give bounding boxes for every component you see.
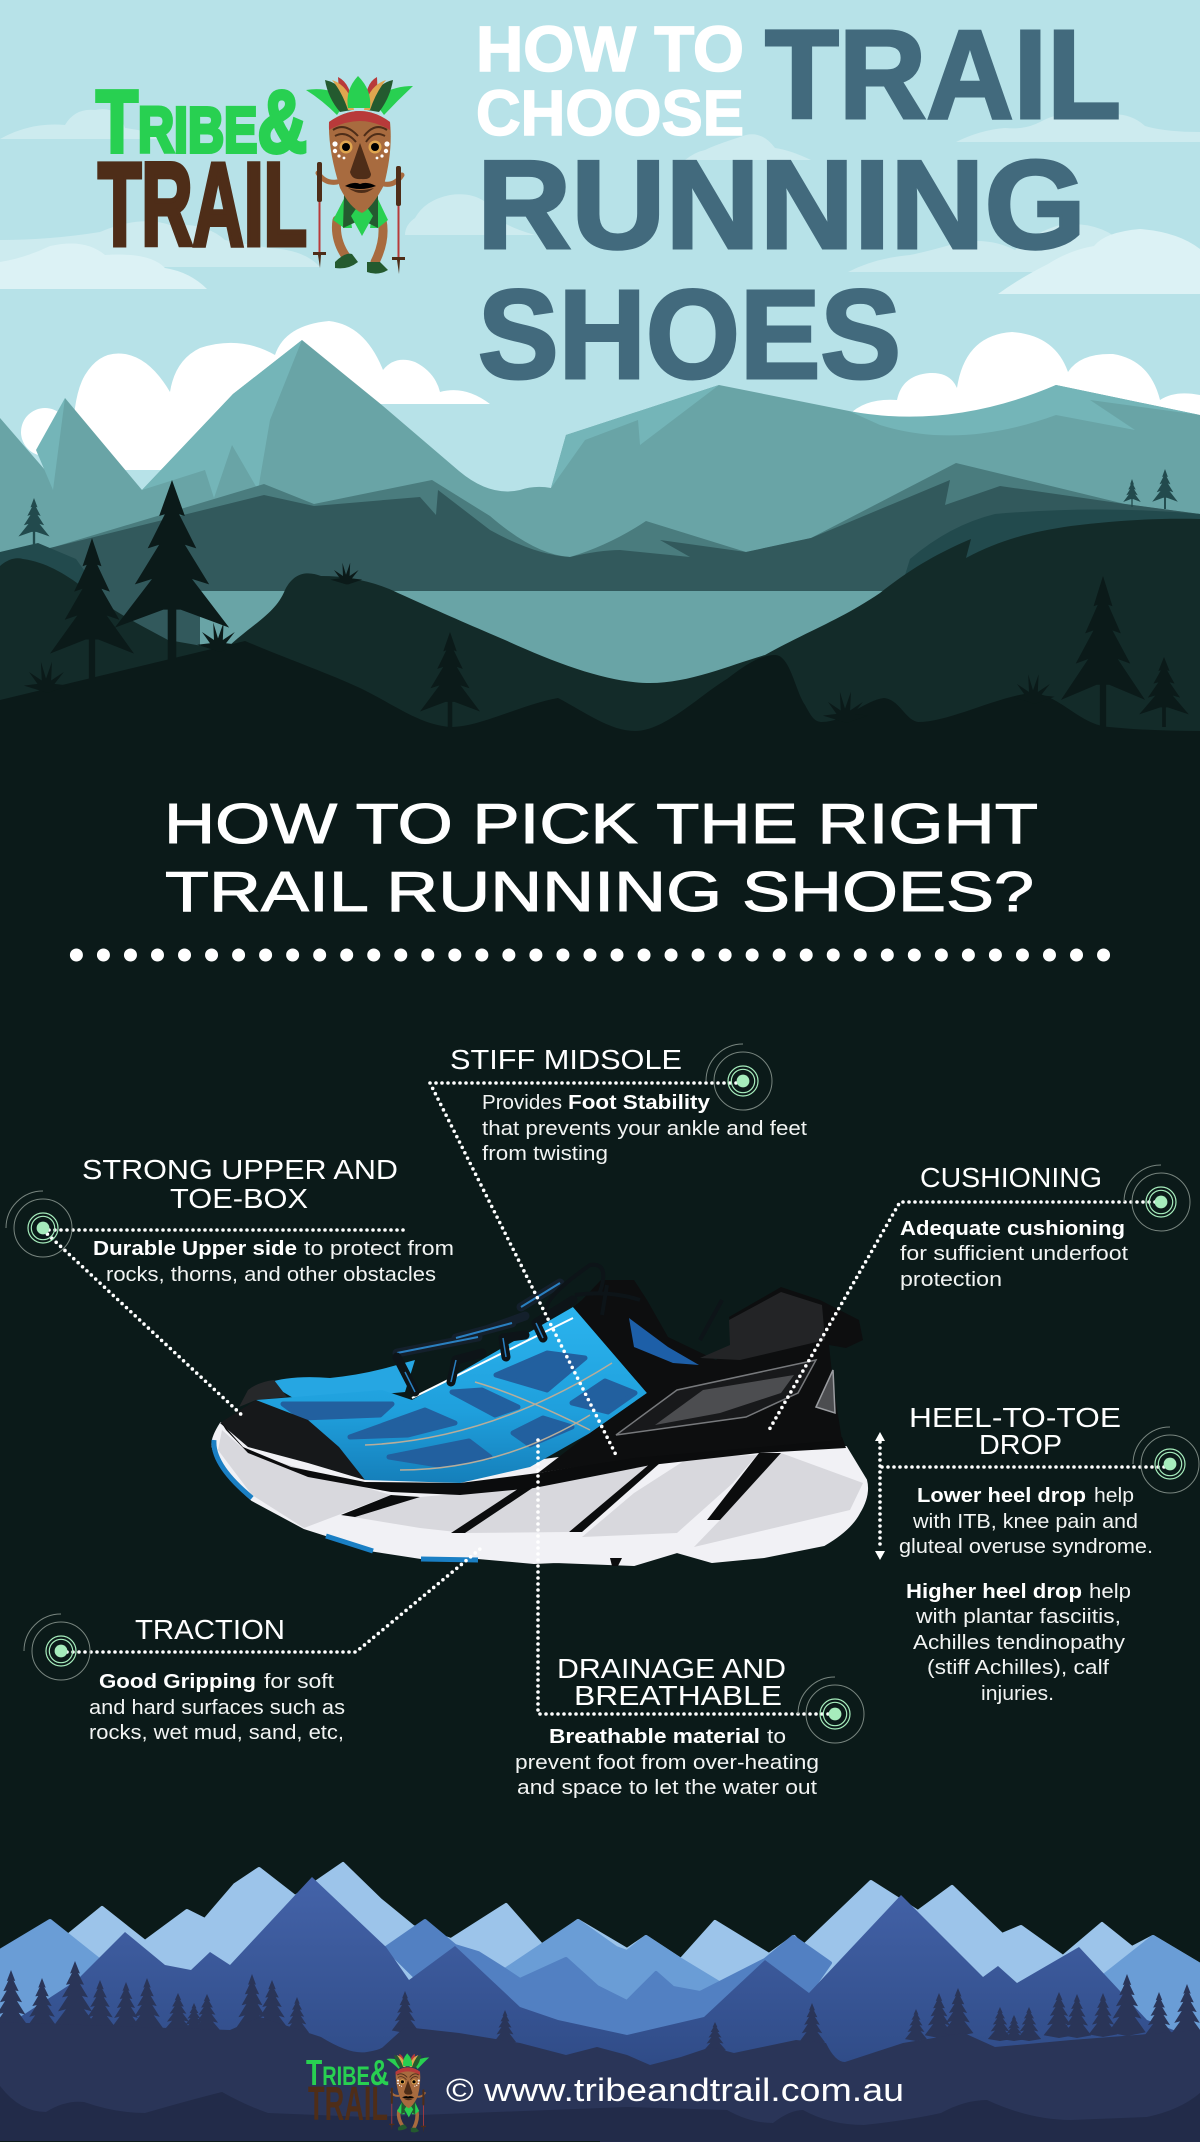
footer logo xyxy=(306,2052,429,2133)
white clouds behind mountains xyxy=(21,321,1200,470)
callout: heel-to-toe drop: injuries. xyxy=(981,1683,1054,1705)
sole stripes xyxy=(341,1453,781,1566)
title: HOW TO xyxy=(476,13,744,85)
darkest foreground ridge xyxy=(0,641,1200,1900)
laces xyxy=(397,1300,573,1392)
teal pine trees xyxy=(18,469,1178,545)
title: CHOOSE xyxy=(476,77,744,149)
title xyxy=(476,4,1121,405)
heel knit collar xyxy=(700,1292,825,1360)
callout: cushioning: CUSHIONING xyxy=(920,1162,1102,1193)
far shoe xyxy=(239,1283,560,1407)
callout: strong upper and toe-box: TOE-BOX xyxy=(170,1183,308,1214)
footer pine trees xyxy=(0,1961,1200,2052)
lake xyxy=(200,591,920,711)
callout: strong upper and toe-box: to protect from xyxy=(304,1238,454,1260)
callout: heel-to-toe drop: gluteal overuse syndrome. xyxy=(899,1536,1153,1558)
callout: strong upper and toe-box: STRONG UPPER AND xyxy=(82,1154,398,1185)
sky background xyxy=(0,0,1200,800)
footer mountains: dark blue range xyxy=(0,1877,1200,2080)
callout: stiff midsole: Provides xyxy=(482,1092,562,1114)
footer mountains: lightest range xyxy=(0,1864,1200,2060)
callout: cushioning: Adequate cushioning xyxy=(900,1218,1125,1240)
black heel upper xyxy=(538,1280,863,1473)
logo: TRAIL xyxy=(98,139,307,271)
blue outsole xyxy=(214,1440,478,1560)
callout: heel-to-toe drop: with ITB, knee pain and xyxy=(912,1511,1138,1533)
vamp xyxy=(256,1307,647,1483)
midsole panels xyxy=(218,1430,863,1547)
middle dark mountain range xyxy=(0,463,1200,720)
footer bottom layer xyxy=(0,2086,1200,2142)
callout: heel-to-toe drop: help xyxy=(1094,1485,1134,1507)
callout: traction: for soft xyxy=(264,1671,334,1693)
callout: strong upper and toe-box xyxy=(82,1154,454,1286)
callout: cushioning xyxy=(900,1162,1129,1291)
callout: stiff midsole: STIFF MIDSOLE xyxy=(450,1044,682,1075)
callout: heel-to-toe drop: help xyxy=(1089,1581,1131,1603)
callout: heel-to-toe drop xyxy=(899,1402,1153,1705)
rim band xyxy=(221,1422,846,1495)
dotted divider xyxy=(76,948,1104,962)
dark foreground hill xyxy=(0,519,1200,800)
callout: drainage and breathable: DRAINAGE AND xyxy=(557,1653,786,1684)
callout: stiff midsole: from twisting xyxy=(482,1143,608,1165)
title: SHOES xyxy=(478,264,901,405)
dark pine trees xyxy=(50,480,1189,729)
footer mountains: mid ranges xyxy=(0,1921,1200,2060)
logo xyxy=(96,72,413,274)
footer logo: TRAIL xyxy=(308,2078,388,2131)
midsole xyxy=(212,1423,867,1565)
heel logo xyxy=(816,1370,835,1413)
callout: drainage and breathable: to xyxy=(767,1726,786,1748)
callout: strong upper and toe-box: rocks, thorns, and other obstacles xyxy=(106,1264,436,1286)
callout: traction xyxy=(89,1614,345,1744)
callout: heel-to-toe drop: (stiff Achilles), calf xyxy=(927,1657,1109,1679)
callout: drainage and breathable: prevent foot from over-heating xyxy=(515,1752,819,1774)
callout: cushioning: for sufficient underfoot xyxy=(900,1243,1129,1265)
callout: cushioning: protection xyxy=(900,1269,1002,1291)
callout: traction: TRACTION xyxy=(135,1614,285,1645)
footer logo: TRIBE& xyxy=(306,2052,389,2093)
callout: heel-to-toe drop: Achilles tendinopathy xyxy=(913,1632,1125,1654)
logo: TRIBE& xyxy=(96,72,307,171)
callout: heel-to-toe drop: HEEL-TO-TOE xyxy=(909,1402,1121,1433)
callout: heel-to-toe drop: Higher heel drop xyxy=(906,1581,1082,1603)
connector lines xyxy=(43,1083,1170,1714)
section heading xyxy=(164,792,1038,924)
shoe photo illustration xyxy=(212,1265,867,1566)
callout: drainage and breathable: BREATHABLE xyxy=(574,1680,782,1711)
heel overlay mesh xyxy=(616,1360,816,1435)
callout: stiff midsole: that prevents your ankle and feet xyxy=(482,1118,807,1140)
callout: drainage and breathable: Breathable material xyxy=(549,1726,760,1748)
title: TRAIL xyxy=(765,4,1121,145)
blue lining xyxy=(629,1318,699,1365)
section heading: HOW TO PICK THE RIGHT xyxy=(164,792,1038,856)
callout: traction: rocks, wet mud, sand, etc, xyxy=(89,1722,344,1744)
ferns xyxy=(24,563,1055,722)
footer foreground band xyxy=(0,2017,1200,2142)
bottom edge line xyxy=(0,2141,600,2142)
heel drop arrow xyxy=(875,1432,885,1560)
toe cap xyxy=(220,1400,365,1480)
vamp trim lines xyxy=(365,1363,612,1470)
callout: traction: Good Gripping xyxy=(99,1671,256,1693)
callout: stiff midsole xyxy=(450,1044,807,1165)
section heading: TRAIL RUNNING SHOES? xyxy=(165,860,1034,924)
pale clouds xyxy=(0,109,1200,294)
title: RUNNING xyxy=(477,134,1086,275)
callout: heel-to-toe drop: Lower heel drop xyxy=(917,1485,1086,1507)
far mountain range xyxy=(0,340,1200,720)
callout: traction: and hard surfaces such as xyxy=(89,1697,345,1719)
callout: strong upper and toe-box: Durable Upper side xyxy=(93,1238,297,1260)
callout: stiff midsole: Foot Stability xyxy=(568,1092,711,1114)
callout: drainage and breathable xyxy=(515,1653,819,1799)
callout: heel-to-toe drop: DROP xyxy=(979,1429,1062,1460)
white lace edge xyxy=(412,1318,573,1398)
footer website: © www.tribeandtrail.com.au xyxy=(446,2072,904,2108)
callout: heel-to-toe drop: with plantar fasciitis, xyxy=(915,1606,1121,1628)
callout: drainage and breathable: and space to let the water out xyxy=(517,1777,817,1799)
teal hills xyxy=(0,510,1200,720)
target markers xyxy=(6,1044,1199,1743)
mesh panels xyxy=(283,1353,635,1465)
